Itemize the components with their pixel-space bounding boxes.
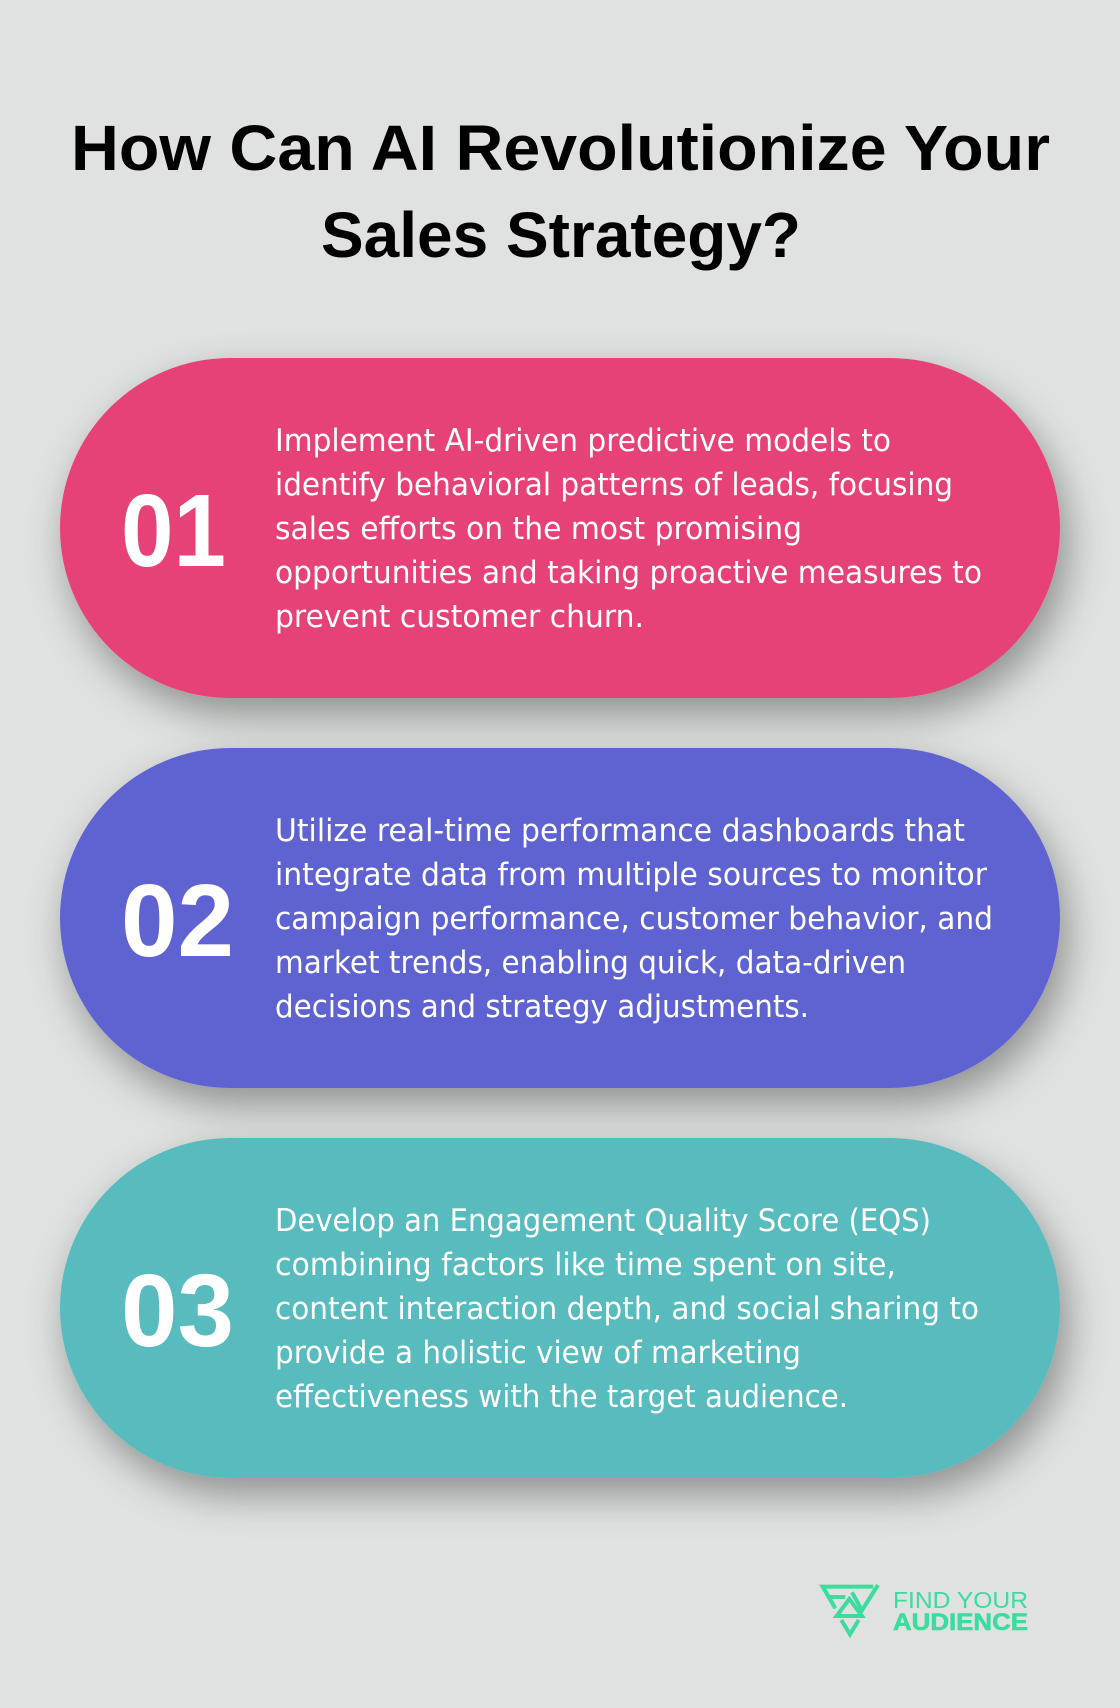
step 01 text: prevent customer churn. [275, 599, 644, 635]
step 01 text: sales efforts on the most promising [275, 511, 802, 547]
step 03 text: Develop an Engagement Quality Score (EQS) [275, 1203, 931, 1239]
step 03 text [275, 1203, 979, 1415]
panel: step 01 [60, 358, 1060, 698]
logo: Find Your Audience: FIND YOUR [893, 1587, 1028, 1613]
step 02 text: integrate data from multiple sources to monitor [275, 857, 987, 893]
step 03 text: content interaction depth, and social sharing to [275, 1291, 979, 1327]
step 03 text: combining factors like time spent on site, [275, 1247, 896, 1283]
logo: Find Your Audience [823, 1585, 1028, 1636]
icon: triangle logo mark [823, 1585, 878, 1634]
title: Sales Strategy? [321, 199, 801, 271]
step number 03: 03 [121, 1253, 234, 1368]
step number 01: 01 [121, 473, 226, 588]
step 02 text: campaign performance, customer behavior, and [275, 901, 993, 937]
step 01 text: opportunities and taking proactive measures to [275, 555, 982, 591]
title [71, 112, 1050, 271]
step 03 text: effectiveness with the target audience. [275, 1379, 848, 1415]
panel: step 03 [60, 1138, 1060, 1478]
step 02 text: Utilize real-time performance dashboards that [275, 813, 965, 849]
step 03 text: provide a holistic view of marketing [275, 1335, 801, 1371]
step 01 text: identify behavioral patterns of leads, focusing [275, 467, 953, 503]
step 01 text: Implement AI-driven predictive models to [275, 423, 891, 459]
step 01 text [275, 423, 982, 635]
panel: step 02 [60, 748, 1060, 1088]
logo: Find Your Audience: AUDIENCE [893, 1609, 1028, 1636]
step 02 text: market trends, enabling quick, data-driven [275, 945, 906, 981]
title: How Can AI Revolutionize Your [71, 112, 1050, 184]
step number 02: 02 [121, 863, 234, 978]
step 02 text [275, 813, 993, 1025]
step 02 text: decisions and strategy adjustments. [275, 989, 809, 1025]
